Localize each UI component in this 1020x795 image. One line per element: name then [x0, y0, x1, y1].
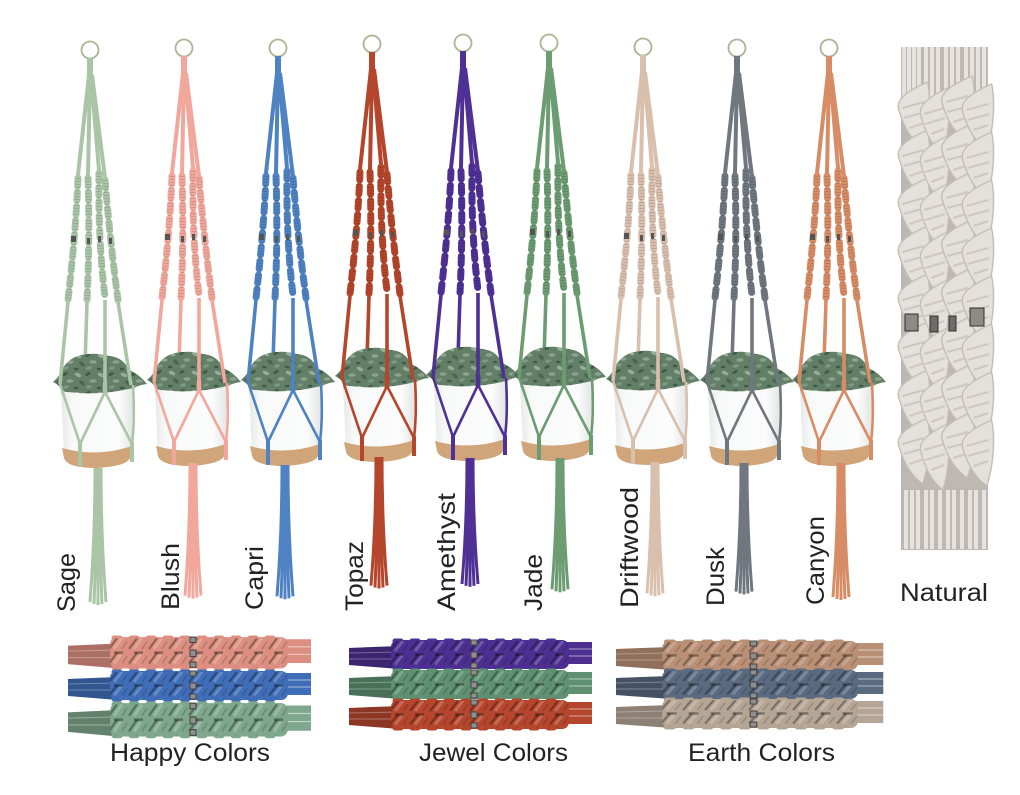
label: Sage: Sage	[53, 553, 81, 612]
label: Jade: Jade	[520, 554, 548, 611]
hanger: topaz	[335, 36, 429, 589]
swatch group: Jewel Colors	[349, 640, 592, 729]
label: Capri: Capri	[241, 546, 269, 610]
hanger: amethyst	[426, 34, 520, 587]
label: Driftwood: Driftwood	[616, 487, 644, 608]
hanger: sage	[53, 42, 147, 605]
hanger: jade	[512, 34, 606, 592]
swatch group: Earth Colors	[616, 641, 883, 728]
heading: Happy Colors: Happy Colors	[110, 739, 270, 767]
hanger: dusk	[700, 40, 794, 595]
label: Blush: Blush	[157, 543, 185, 610]
heading: Jewel Colors: Jewel Colors	[419, 739, 568, 767]
label: Amethyst: Amethyst	[433, 493, 461, 611]
hanger: capri	[241, 40, 335, 599]
label: Dusk: Dusk	[702, 546, 730, 606]
swatch group: Happy Colors	[68, 637, 311, 736]
hanger: blush	[147, 40, 241, 599]
label: Natural: Natural	[900, 579, 988, 607]
label: Canyon: Canyon	[802, 516, 830, 605]
hanger: driftwood	[606, 38, 700, 596]
natural cord close-up	[898, 47, 994, 550]
heading: Earth Colors: Earth Colors	[688, 739, 835, 767]
hanger: canyon	[792, 40, 886, 600]
label: Topaz: Topaz	[341, 541, 369, 611]
